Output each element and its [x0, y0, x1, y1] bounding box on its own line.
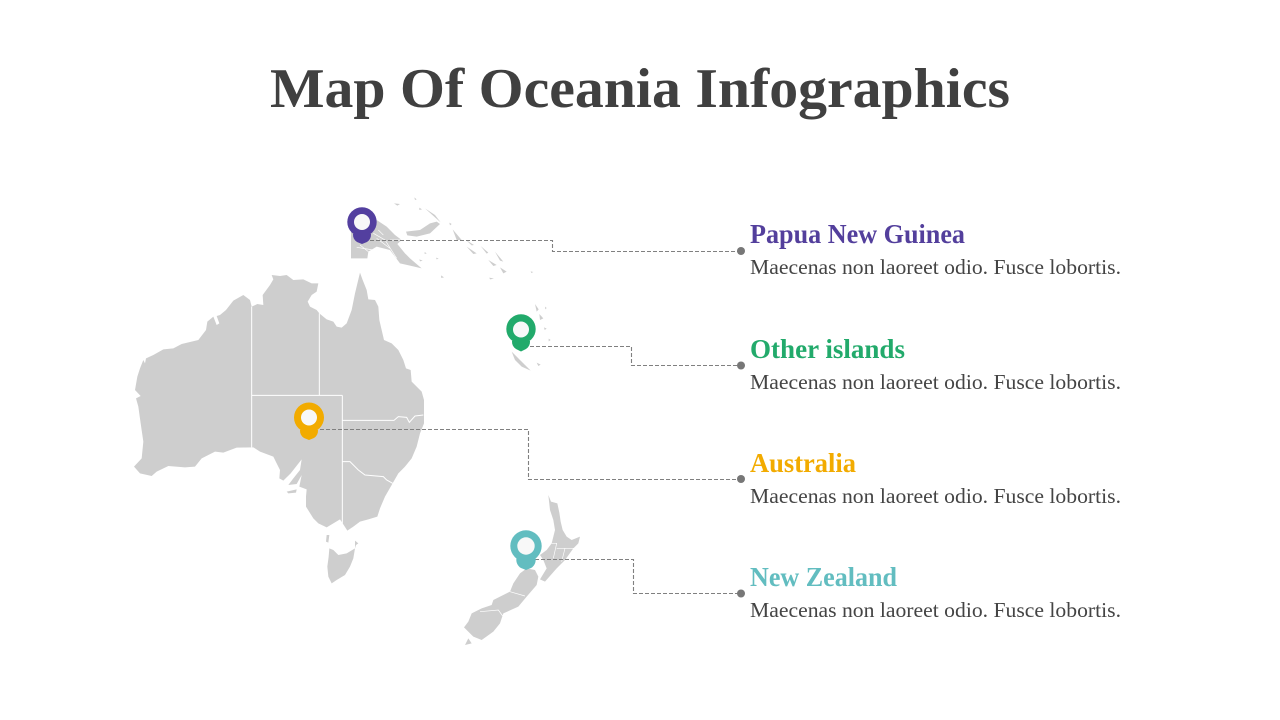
text block: New Zealand: New Zealand [750, 562, 897, 592]
connector: Other islands [530, 346, 740, 366]
connector end dots [737, 247, 745, 598]
map: New Zealand [464, 495, 580, 645]
text block: Australia: Australia [750, 448, 856, 478]
text block: New Zealand [750, 562, 1121, 622]
pin: New Zealand [510, 530, 542, 570]
text block: Australia [750, 448, 1121, 508]
title: Map Of Oceania Infographics [270, 58, 1010, 120]
text block: Papua New Guinea [750, 219, 1121, 279]
map: Australia [134, 273, 424, 583]
text block: Australia: Maecenas non laoreet odio. Fusce lobortis. [750, 484, 1121, 508]
pin: Australia [294, 402, 324, 440]
text block: Other islands: Other islands [750, 334, 905, 364]
pin: Other islands [506, 314, 536, 352]
text block: Papua New Guinea: Papua New Guinea [750, 219, 965, 249]
pin: Papua New Guinea [347, 207, 377, 244]
map: Papua New Guinea [351, 197, 533, 279]
connector: Papua New Guinea [370, 240, 740, 252]
text block: Other islands: Maecenas non laoreet odio. Fusce lobortis. [750, 370, 1121, 394]
Kangaroo Island [287, 489, 297, 493]
text block: New Zealand: Maecenas non laoreet odio. Fusce lobortis. [750, 598, 1121, 622]
text block: Papua New Guinea: Maecenas non laoreet odio. Fusce lobortis. [750, 255, 1121, 279]
connector: New Zealand [535, 560, 740, 594]
map: Tasmania [326, 535, 358, 583]
connector: Australia [320, 430, 740, 480]
map: other islands [512, 304, 551, 371]
text block: Other islands [750, 334, 1121, 394]
